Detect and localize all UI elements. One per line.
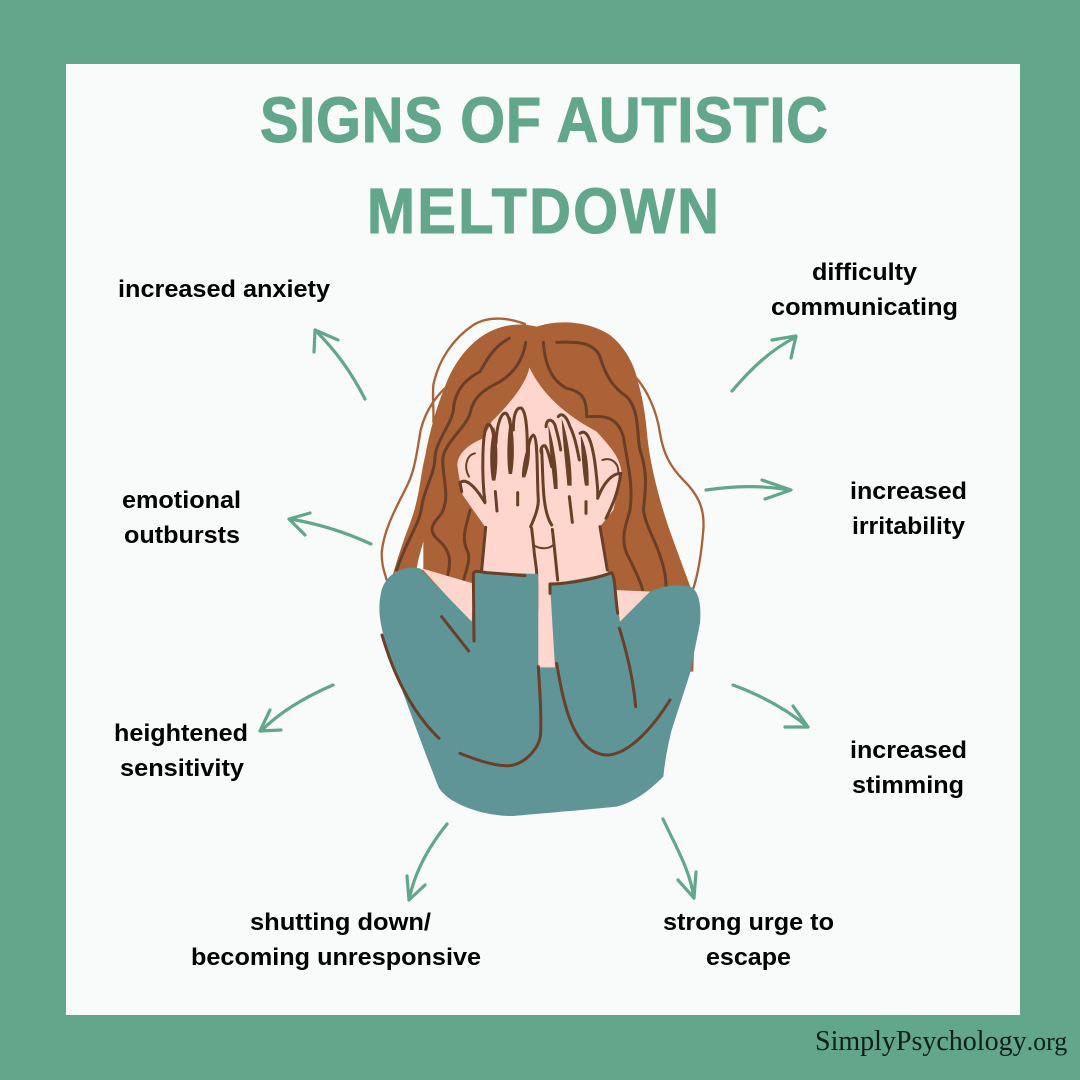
label: difficulty communicating: difficulty <box>812 259 918 286</box>
arrow: to heightened sensitivity <box>260 685 333 731</box>
stray hair strands <box>382 319 704 588</box>
label: heightened sensitivity: sensitivity <box>120 755 245 782</box>
label: increased stimming <box>850 737 967 799</box>
left hand lines <box>460 408 538 573</box>
arrow: to increased irritability <box>706 480 791 499</box>
label: emotional outbursts: emotional <box>122 487 241 514</box>
hair gap by the neck <box>417 542 423 570</box>
arrow: to emotional outbursts <box>289 513 371 544</box>
footer: source credit: SimplyPsychology.org <box>815 1026 1067 1057</box>
illustration: woman covering her face <box>379 319 704 816</box>
sweater fold lines <box>382 571 670 766</box>
mouth <box>533 545 553 548</box>
label: shutting down / becoming unresponsive: becoming unresponsive <box>191 944 481 971</box>
label: shutting down / becoming unresponsive <box>191 909 481 971</box>
label: difficulty communicating <box>771 259 958 321</box>
label: increased irritability: increased <box>850 478 967 505</box>
ears <box>466 453 618 477</box>
skin: face, ears and hands <box>457 367 622 583</box>
title <box>260 84 828 247</box>
label: heightened sensitivity <box>114 720 248 782</box>
label: increased irritability: irritability <box>852 513 966 540</box>
title: MELTDOWN <box>367 175 719 247</box>
label: increased irritability <box>850 478 967 540</box>
label: strong urge to escape: strong urge to <box>663 909 834 936</box>
label: strong urge to escape: escape <box>706 944 791 971</box>
label: increased anxiety: increased anxiety <box>118 276 331 303</box>
label: emotional outbursts <box>122 487 241 549</box>
label: strong urge to escape <box>663 909 834 971</box>
sweater <box>379 568 700 816</box>
label: shutting down / becoming unresponsive: shutting down/ <box>250 909 431 936</box>
right hand lines <box>541 415 621 580</box>
hair strands <box>397 338 666 590</box>
arrow: to increased anxiety <box>314 330 365 399</box>
neck and chest skin <box>422 568 652 670</box>
arrow: to difficulty communicating <box>732 336 796 391</box>
label: emotional outbursts: outbursts <box>124 522 240 549</box>
panel: white card <box>66 64 1020 1015</box>
title: SIGNS OF AUTISTIC <box>260 84 828 156</box>
arrow: to shutting down <box>407 824 447 900</box>
label: difficulty communicating: communicating <box>771 294 958 321</box>
hair <box>383 322 694 672</box>
arrow: to strong urge to escape <box>663 819 696 898</box>
label: heightened sensitivity: heightened <box>114 720 248 747</box>
label: increased stimming: increased <box>850 737 967 764</box>
label: increased stimming: stimming <box>852 772 964 799</box>
arrow: to increased stimming <box>733 685 808 727</box>
